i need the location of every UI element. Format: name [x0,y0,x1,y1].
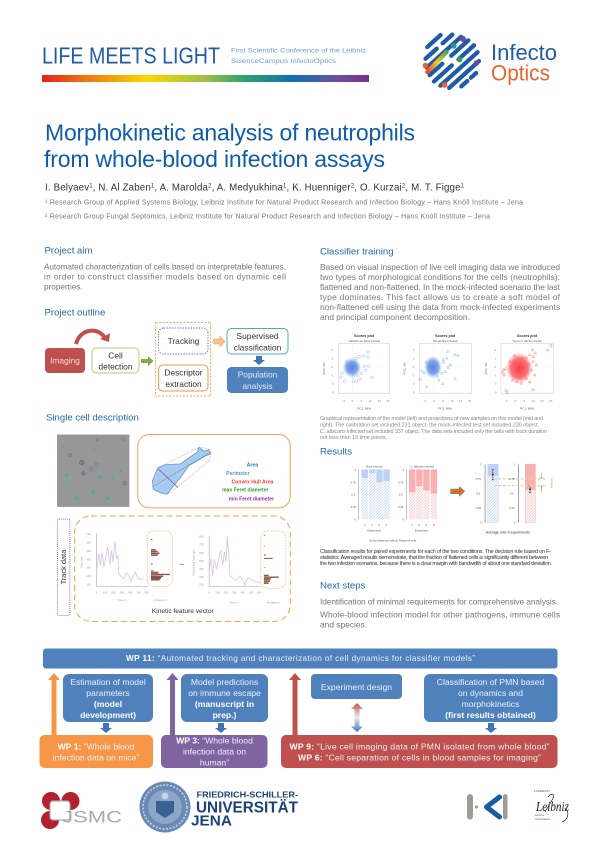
conference name: LIFE MEETS LIGHT [42,42,220,68]
scatter plot: calibration: 0 [351,399,353,403]
box: classification of PMN: Classification of PMN based [437,677,544,687]
chart: convex area over time: 700 [199,543,204,547]
feature box [138,435,290,508]
scatter plot: calibration [322,334,390,410]
kinetic feature vector label: Kinetic feature vector [152,608,214,615]
scatter plot: mock test: 5 [442,399,444,403]
green arrow [141,356,154,366]
feature legend: Perimeter [226,471,250,477]
chart: per-experiment bars: 3 [379,523,381,527]
chart: per-experiment bars: 2 [371,523,373,527]
box: estimation of model parameters: (model [94,699,122,709]
scatter plot: infected test: 1 [494,357,496,361]
blue down arrow [253,356,265,365]
logo wordmark: Infecto [491,40,557,65]
panel: next steps [320,580,560,630]
logo: Leibniz Association: Leibniz [535,813,545,817]
cell shape diagram [152,447,211,494]
conference subtitle: First Scientific Conference of the Leibniz [231,48,367,54]
chart: per-experiment bars: 4 [386,523,388,527]
heading: classifier training: Classifier training [320,246,394,258]
chart: averaged bars: 1 [480,463,482,467]
chart: convex area over time: 200 [224,590,229,594]
authors: 1 [151,184,155,190]
classifier text: two types of morphological conditions for the cells (neutrophils): [320,272,560,282]
box: WP 9 and WP 6: WP 6: “Cell separation of cells in blood samples for imaging” [298,752,541,762]
chart: area over time: 600 [144,590,149,594]
next steps text [320,596,560,630]
cell detection box: detection [98,362,133,372]
heading: next steps: Next steps [320,580,366,592]
project aim text: in order to construct classifier models based on dynamic cell [44,272,286,282]
population analysis box: Population [238,370,278,380]
chart: area over time: 200 [111,590,116,594]
logo: university name: JENA [191,812,232,830]
chart: area over time [80,531,172,602]
scatter plot: calibration: 10 [368,399,372,403]
title: from whole-blood infection assays [44,146,385,172]
kinetic feature vector frame [75,516,290,621]
panel: project aim [44,246,286,292]
chart: convex area over time: 300 [232,590,237,594]
minus sign: – [180,559,185,568]
scatter plot: infected test: 10 [531,399,535,403]
project aim text [44,262,286,292]
chart: area over time: Frequency [154,598,167,602]
chart: area over time: Area, µm² [80,556,84,568]
scatter plot: mock test: -5 [424,399,427,403]
heading: project aim: Project aim [44,246,92,256]
heading: project outline: Project outline [44,308,105,318]
classifier text: and principal component decomposition. [320,312,470,322]
affiliations: ² Research Group Fungal Septomics, Leibniz Institute for Natural Product Research and Infection Biology – Hans Knöll Institute – Jena [45,214,490,220]
scatter plot: calibration: PC1, 69% [357,406,371,410]
box: estimation of model parameters: Estimation of model [70,677,146,687]
logo: JSMC: JSMC [62,808,122,826]
title: Morphokinetic analysis of neutrophils [45,120,415,146]
chart: per-experiment bars: 0.5 [351,492,356,496]
tracking box: Tracking [168,336,200,346]
scatter plot: mock test: PC2, 3% [403,362,407,374]
box: classification of PMN: morphokinetics [462,699,519,709]
scatter plot: mock test: Scores plot [435,334,456,338]
chart: per-experiment bars: 1 [364,523,366,527]
arrow: down 1 [100,723,112,733]
logo: HKI [467,794,508,820]
chart: per-experiment bars: 0.75 [351,480,356,484]
chart: per-experiment bars: 2 [418,523,420,527]
classifier text: Based on visual inspection of live cell imaging data we introduced [320,262,560,272]
project aim text: properties. [44,282,83,292]
box: WP 3: human” [200,758,229,768]
next steps text: Identification of minimal requirements for comprehensive analysis. [320,596,558,606]
chart: per-experiment bars: 1 [411,523,413,527]
arrow: orange up [48,673,60,735]
plot caption [320,416,547,441]
track data label: Track data [59,549,68,584]
chart: averaged bars: 0.25 [509,506,515,510]
chart: averaged bars: 0 [514,520,516,524]
scatter plot: calibration: -1 [331,374,334,378]
conference subtitle [231,48,367,65]
chart: convex area over time: 500 [199,559,204,563]
scatter plot: calibration: 2 [331,348,333,352]
micrograph [57,435,129,507]
chart: convex area over time: 400 [241,590,246,594]
box: model predictions: (manuscript in [195,699,254,709]
chart: convex area over time: 800 [199,535,204,539]
track data label [57,519,70,615]
box: WP 1: WP 1: “Whole blood [58,742,135,752]
scatter plot: mock test: 2 [413,348,415,352]
title [44,120,415,172]
population analysis box: analysis [242,381,273,391]
chart: averaged bars: 0.5 [476,491,481,495]
chart: per-experiment bars: 0.25 [398,505,404,509]
box: WP 9 and WP 6: WP 9: “Live cell imaging data of PMN isolated from whole blood” [290,742,550,752]
logo: Leibniz Association [534,789,569,822]
chart: per-experiment bars: 0.25 [351,505,356,509]
orange arrow [214,336,225,347]
descriptor extraction box [158,365,208,391]
results caption [320,549,552,567]
chart: area over time: 700 [86,532,91,536]
chart: per-experiment bars: 3 [426,523,428,527]
scatter plot: mock test [403,334,472,410]
chart: convex area over time: 600 [199,551,204,555]
results caption: the two infection scenarios, because there is a clear margin with bandwidth of about one standard deviation. [320,561,552,567]
scatter plots [322,334,553,410]
chart: averaged bars: 0.25 [476,506,481,510]
box: WP 3: infection data on [183,746,246,756]
descriptor extraction box: extraction [165,379,202,389]
logo: university name: UNIVERSITÄT [196,800,299,816]
cell detection box [92,348,139,373]
chart: averaged bars: Average over 4 experiments [486,530,530,534]
affiliations: ¹ Research Group of Applied Systems Biology, Leibniz Institute for Natural Product Research and Infection Biology – Hans Knöll Institute – Jena [45,200,523,206]
chart: averaged bars: 0.75 [509,477,515,481]
scatter plot: mock test: 0 [413,365,415,369]
chart: convex area over time: Frequency [267,601,280,605]
rainbow bar [42,75,369,82]
scatter plot: calibration: 5 [361,399,363,403]
scatter plot: calibration: 20 [386,399,390,403]
authors: , N. Al Zaben [93,182,151,194]
chart: area over time: 400 [86,557,91,561]
chart: area over time: Time, s [118,598,127,602]
scatter plot: infected test: PC2, 3% [484,362,488,374]
scatter plot: mock test: 15 [459,399,463,403]
box: model predictions: Model predictions [191,677,258,687]
next steps text: and species. [320,620,367,630]
box: WP 1 [40,735,153,768]
dashed group box [156,322,210,396]
panel: results [320,446,554,567]
scatter plot: calibration: -2 [331,382,334,386]
scatter plot: mock test: 10 [450,399,454,403]
scatter plot: mock test: -2 [412,382,415,386]
box: experiment design: Experiment design [321,682,392,692]
plot caption: Graphical representation of the model (left) and projections of new samples on this model (mid and [320,416,543,422]
results charts [351,463,554,542]
box: estimation of model parameters: parameters [86,688,130,698]
supervised classification box: Supervised [237,331,279,341]
chart: convex area over time: 600 [257,590,262,594]
authors: , A. Marolda [154,182,209,194]
feature legend: max Feret diameter [222,487,269,493]
plot caption: right). The calibration set included 231 object, the mock-infected test set included 230 object, [320,422,540,428]
chart: per-experiment bars [351,465,437,542]
icon: striped circle [414,23,489,98]
box: model predictions [181,674,268,722]
authors: , M. T. Figge [405,182,460,194]
chart: averaged bars: 1 [514,463,516,467]
chart: per-experiment bars: 1 [403,468,405,472]
authors: 1 [283,184,287,190]
logo: university name: FRIEDRICH-SCHILLER- [196,790,298,800]
chart: area over time: 400 [128,590,133,594]
chart: area over time: 600 [86,540,91,544]
chart: per-experiment bars: 0 [355,517,357,521]
descriptor extraction box: Descriptor [164,368,203,378]
chart: area over time: 100 [86,583,91,587]
scatter plot: infected test [484,334,553,410]
panel: work packages [40,648,558,768]
chart: per-experiment bars: 0 [403,517,405,521]
authors: , O. Kurzai [354,182,402,194]
supervised classification box [227,328,288,354]
scatter plot: calibration: Calibration set (Mock infected) [348,340,380,343]
tracking box [158,328,208,354]
panel: classifier training [320,246,561,441]
conference banner [42,42,369,82]
arrow: down 2 [215,723,227,733]
chart: averaged bars: 0 [480,520,482,524]
box: model predictions: on immune escape [188,688,261,698]
feature legend: Convex Hull Area [232,480,273,486]
chart: area over time: 300 [86,566,91,570]
authors: , A. Medyukhina [212,182,283,194]
supervised classification box: classification [234,342,282,352]
authors: 1 [89,184,93,190]
next steps text: Whole-blood infection model for other pathogens, immune cells [320,610,560,620]
scatter plot: infected test: -5 [505,399,508,403]
orange arrow [451,487,465,496]
project aim text: Automated characterization of cells based on interpretable features, [44,262,286,272]
curved arrow [76,331,110,344]
chart: area over time: 500 [86,549,91,553]
chart: convex area over time: Convex hull Area, µm² [191,549,195,576]
box: WP 1: infection data on mice” [53,752,139,762]
box: WP 9 and WP 6 [281,735,558,768]
box: classification of PMN: on dynamics and [458,688,523,698]
scatter plot: infected test: 15 [540,399,544,403]
box: classification of PMN: (first results obtained) [445,710,536,720]
panel: project outline [44,308,288,396]
scatter plot: infected test: -1 [494,374,497,378]
WP 11 bar: WP 11: “Automated tracking and characterization of cell dynamics for classifier models” [126,654,475,663]
feature legend [222,463,274,502]
authors: 2 [208,184,212,190]
chart: per-experiment bars: 1 [355,468,357,472]
panel: single cell description [57,435,290,621]
scatter plot: mock test: Test set (Mock-infected) [433,340,458,343]
authors: 2 [402,184,406,190]
chart: convex area over time: 300 [199,575,204,579]
scatter plot: infected test: Test set C. albicans infected [512,340,542,343]
scatter plot: infected test: 20 [549,399,553,403]
scatter plot: infected test: 5 [523,399,525,403]
box: classification of PMN [424,674,558,722]
scatter plot: infected test: -3 [494,391,497,395]
scatter plot: infected test: Scores plot [517,334,538,338]
chart: convex area over time: 100 [215,590,220,594]
chart: convex area over time: 200 [199,583,204,587]
chart: per-experiment bars: C. albicans infected [410,465,434,469]
logo: university seal [140,782,190,832]
results caption: Classification results for paired experiments for each of the two conditions. The decision rule based on F- [320,549,551,555]
scatter plot: mock test: PC1, 69% [438,406,452,410]
chart: area over time: 100 [103,590,108,594]
scatter plot: mock test: -3 [412,391,415,395]
chart: per-experiment bars: 0.5 [399,492,403,496]
logo: Leibniz Association: Association [535,817,551,821]
authors: 1 [461,184,465,190]
heading: single cell description: Single cell description [46,412,139,424]
heading: results: Results [320,446,352,458]
chart: convex area over time: 0 [208,590,210,594]
scatter plot: calibration: 0 [331,365,333,369]
chart: area over time: 0 [96,590,98,594]
classifier text: flattened and non-flattened. In the mock-infected scenario the last [320,282,561,292]
arrow: red up [289,673,301,735]
affiliations [45,200,523,220]
results caption: statistics. Averaged results demonstrate, that the fraction of flattened cells is significantly different between [320,555,548,561]
imaging box: Imaging [50,356,80,366]
chart: area over time: 200 [86,574,91,578]
logo: university name [191,790,299,830]
scatter plot: infected test: -2 [494,382,497,386]
classifier text: type dominates. This fact allows us to create a soft model of [320,292,561,302]
arrow: down 3 [485,723,497,733]
scatter plot: calibration: -3 [331,391,334,395]
box: model predictions: prep.) [213,710,237,720]
scatter plot: infected test: 0 [515,399,517,403]
logo wordmark [491,40,557,86]
logo wordmark: Optics [491,60,550,86]
chart: per-experiment bars: Experiment [367,529,381,533]
scatter plot: mock test: 0 [433,399,435,403]
scatter plot: mock test: 1 [413,357,415,361]
chart: per-experiment bars: Mock-infected [366,465,383,469]
logo: InfectoOptics [414,23,557,98]
chart: averaged bars: 0.75 [476,477,481,481]
classifier text: non-flattened cell using the data from mock-infected experiments [320,302,560,312]
chart: averaged bars [476,463,554,534]
box: estimation of model parameters: development) [80,710,136,720]
authors: I. Belyaev [45,182,89,194]
chart: per-experiment bars: 0.75 [398,480,404,484]
chart: area over time: 300 [120,590,125,594]
scatter plot: mock test: 20 [468,399,472,403]
population analysis box [227,367,288,393]
chart: per-experiment bars: Experiment [415,529,429,533]
conference subtitle: ScienceCampus InfectoOptics [231,58,337,65]
plot caption: not less than 10 time points. [320,435,387,441]
chart: averaged bars: 0.5 [510,491,514,495]
chart: convex area over time [191,531,286,605]
logo: Leibniz Association: FUNDED BY [534,789,550,793]
logo: JSMC [41,792,122,829]
scatter plot: mock test: -1 [412,374,415,378]
scatter plot: calibration: 15 [378,399,381,403]
scatter plot: infected test: PC1, 68% [520,406,534,410]
chart: per-experiment bars: 5 [433,523,435,527]
WP 11 bar [43,648,558,668]
logo: Leibniz Association: Leibniz [535,800,569,815]
scatter plot: calibration: PC2, 4% [322,362,326,374]
authors: , K. Huenniger [286,182,351,194]
scatter plot: calibration: Scores plot [354,334,375,338]
box: experiment design [311,674,402,699]
chart: convex area over time: Time, s [229,601,239,605]
box: WP 3: WP 3: “Whole blood [176,736,253,746]
scatter plot: calibration: 1 [331,357,333,361]
chart: convex area over time: 500 [249,590,254,594]
imaging box [45,348,85,373]
feature legend: Area [247,463,258,469]
chart: per-experiment bars: ▨ Non-flattened cells ▨ Flattened cells [369,538,417,542]
scatter plot: calibration: -5 [342,399,345,403]
box: estimation of model parameters [63,674,153,722]
authors: 2 [351,184,355,190]
scatter plot: infected test: 0 [494,365,496,369]
chart: convex area over time: 400 [199,567,204,571]
scatter plot: infected test: 2 [494,348,496,352]
feature legend: min Feret diameter [229,496,274,502]
box: WP 3 [161,735,268,768]
plot caption: C. albicans infected set included 337 object. The data sets included only the cells with track duration [320,429,547,435]
cell detection box: Cell [108,350,123,360]
chart: area over time: 500 [137,590,142,594]
classifier text [320,262,561,322]
arrow: double headed [351,703,363,732]
chart: averaged bars: Margin [550,478,554,488]
arrow: purple up [166,673,178,735]
